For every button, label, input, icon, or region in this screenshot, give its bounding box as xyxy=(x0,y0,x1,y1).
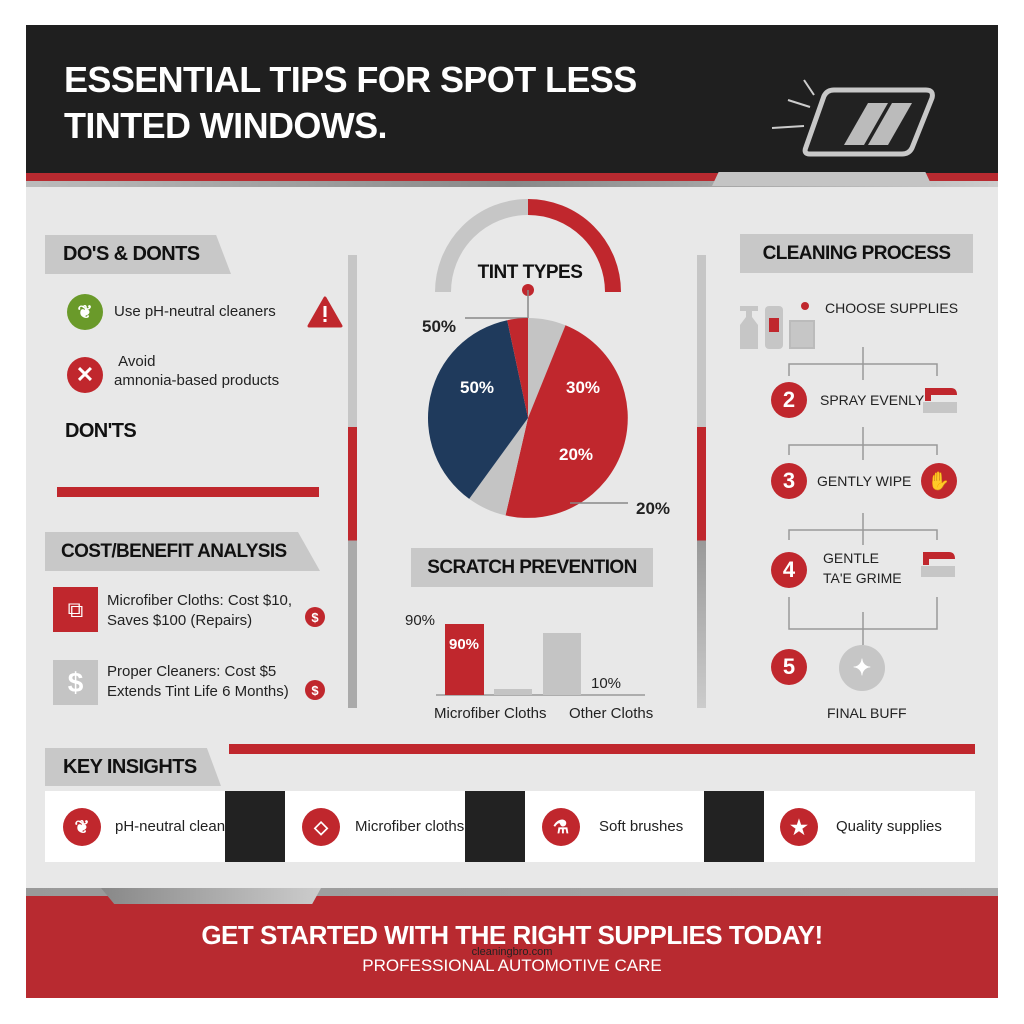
title: TINTED WINDOWS. xyxy=(64,105,387,146)
step 2: spray evenly xyxy=(771,382,957,418)
step 1: choose supplies xyxy=(740,300,958,349)
step 5: final buff: ✦ xyxy=(853,655,871,680)
item: proper cleaners cost: Extends Tint Life 6 Months) xyxy=(107,683,289,700)
step 3: gently wipe: 3 xyxy=(783,468,795,493)
item: microfiber cost xyxy=(53,587,325,632)
step 5: final buff xyxy=(771,645,907,721)
divider: right xyxy=(697,255,706,708)
bar chart: 10% xyxy=(591,675,621,692)
panel: cost/benefit xyxy=(45,532,325,705)
heading: scratch prevention xyxy=(411,548,653,587)
insight: pH-neutral xyxy=(63,808,246,846)
heading: tint types: TINT TYPES xyxy=(478,262,582,283)
header stripe xyxy=(26,173,998,181)
insights row xyxy=(45,791,975,862)
item: proper cleaners cost: $ xyxy=(311,682,319,698)
subheading: don'ts: DON'TS xyxy=(65,420,136,442)
title: ESSENTIAL TIPS FOR SPOT LESS xyxy=(64,59,637,100)
heading: do's & donts xyxy=(45,235,231,274)
heading: scratch prevention: SCRATCH PREVENTION xyxy=(427,557,637,578)
footer headline: GET STARTED WITH THE RIGHT SUPPLIES TODAY! xyxy=(201,920,823,950)
bar chart xyxy=(405,612,653,722)
insight: microfiber: ◇ xyxy=(314,816,328,836)
insight: soft brushes: ⚗ xyxy=(553,816,569,836)
chart: tint types pie: 20% xyxy=(559,445,593,464)
chart: tint types pie xyxy=(422,199,670,518)
header banner xyxy=(26,25,998,173)
bar chart: Microfiber Cloths xyxy=(434,705,547,722)
insight: quality supplies xyxy=(780,808,942,846)
chart: tint types pie: 50% xyxy=(460,378,494,397)
chart: tint types pie: 30% xyxy=(566,378,600,397)
item: microfiber cost: $ xyxy=(311,610,319,624)
insight: pH-neutral: pH-neutral cleaners xyxy=(115,818,246,835)
panel: do's & donts xyxy=(45,235,343,497)
heading: cost/benefit xyxy=(45,532,320,571)
step 3: gently wipe xyxy=(771,463,957,499)
panel: scratch prevention xyxy=(405,548,653,722)
item: proper cleaners cost: $ xyxy=(68,667,83,698)
insight: pH-neutral: ❦ xyxy=(74,816,90,836)
item: microfiber cost: ⧉ xyxy=(68,597,83,622)
step 4: gentle take grime: GENTLE xyxy=(823,550,879,566)
insight: quality supplies: Quality supplies xyxy=(836,818,942,835)
item: pH-neutral: ❦ xyxy=(77,302,93,322)
heading: do's & donts: DO'S & DONTS xyxy=(63,243,199,265)
gauge arc xyxy=(443,207,613,292)
insight: microfiber: Microfiber cloths xyxy=(355,818,464,835)
heading: cleaning process: CLEANING PROCESS xyxy=(763,243,950,264)
item: proper cleaners cost xyxy=(53,660,325,705)
insight: soft brushes xyxy=(542,808,683,846)
step 1: choose supplies: CHOOSE SUPPLIES xyxy=(825,300,958,316)
panel: cleaning process xyxy=(740,234,973,721)
chart: tint types pie: 50% xyxy=(422,317,456,336)
divider: left xyxy=(348,255,357,708)
step 5: final buff: FINAL BUFF xyxy=(827,705,907,721)
step 2: spray evenly: 2 xyxy=(783,387,795,412)
icon: warning xyxy=(308,296,343,328)
step 4: gentle take grime: 4 xyxy=(783,557,795,582)
step 4: gentle take grime xyxy=(771,550,955,588)
step 5: final buff: 5 xyxy=(783,654,795,679)
bar chart: Other Cloths xyxy=(569,705,653,722)
heading: cleaning process xyxy=(740,234,973,273)
pie slices xyxy=(428,318,628,518)
insight: microfiber xyxy=(302,808,464,846)
item: proper cleaners cost: Proper Cleaners: Cost $5 xyxy=(107,663,276,680)
footer banner xyxy=(26,888,998,998)
chart: tint types pie: 20% xyxy=(636,499,670,518)
heading: cost/benefit: COST/BENEFIT ANALYSIS xyxy=(61,541,287,562)
step 3: gently wipe: GENTLY WIPE xyxy=(817,473,911,489)
item: avoid ammonia xyxy=(67,353,279,393)
panel: key insights xyxy=(45,744,975,862)
bar chart: 90% xyxy=(405,612,435,629)
item: microfiber cost: Microfiber Cloths: Cost $10, xyxy=(107,592,292,609)
heading: key insights xyxy=(45,748,221,786)
item: avoid ammonia: Avoid xyxy=(118,353,155,370)
insight: soft brushes: Soft brushes xyxy=(599,818,683,835)
step 3: gently wipe: ✋ xyxy=(928,470,950,490)
heading: key insights: KEY INSIGHTS xyxy=(63,756,197,778)
item: microfiber cost: Saves $100 (Repairs) xyxy=(107,612,252,629)
footer subtitle: PROFESSIONAL AUTOMOTIVE CARE xyxy=(362,956,662,975)
item: pH-neutral xyxy=(67,294,343,330)
bar chart: 90% xyxy=(449,636,479,653)
item: avoid ammonia: ✕ xyxy=(76,362,94,387)
item: pH-neutral: Use pH-neutral cleaners xyxy=(114,303,276,320)
step 2: spray evenly: SPRAY EVENLY xyxy=(820,392,924,408)
icon: window logo xyxy=(772,80,935,156)
title xyxy=(64,59,637,146)
insight: quality supplies: ★ xyxy=(790,816,808,838)
footer url: cleaningbro.com xyxy=(472,946,552,958)
step 4: gentle take grime: TA'E GRIME xyxy=(823,570,902,586)
item: avoid ammonia: amnonia-based products xyxy=(114,372,279,389)
